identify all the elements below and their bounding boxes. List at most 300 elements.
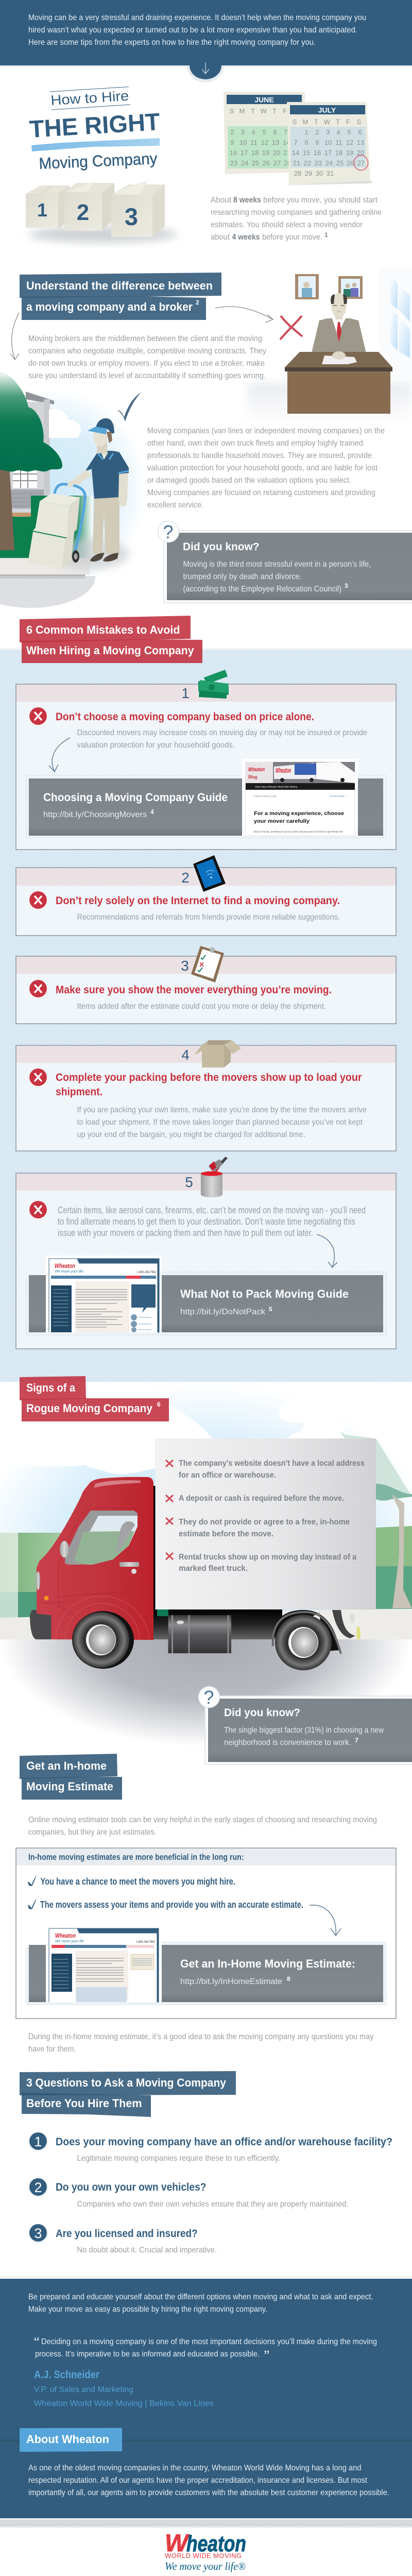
number 4: 4 <box>181 1047 190 1063</box>
text: during the estimate: have for them. <box>28 2045 76 2054</box>
icon: three numbered moving boxes <box>26 180 178 243</box>
screenshot: web page <box>46 1256 162 1332</box>
calendar: July: 8 <box>304 139 308 146</box>
calendar: July: 17 <box>324 149 332 157</box>
calendars: June and July <box>224 92 373 185</box>
calendar: July: 14 <box>292 149 299 157</box>
heading: get an in-home moving estimate: Moving Estimate <box>26 1780 113 1793</box>
truck box: signs text: estimate before the move. <box>179 1530 273 1538</box>
callout: choosing a moving company guide: Choosing a Moving Company Guide <box>43 791 228 804</box>
calendar: July: 15 <box>303 149 310 157</box>
calendar: July: 31 <box>327 170 334 177</box>
text: when to start researching <box>211 196 382 242</box>
badge 2: 2 <box>34 2180 42 2195</box>
sky <box>0 389 147 590</box>
truck box: signs text <box>156 1438 376 1609</box>
text: moving brokers: companies who negotiate multiple, competitive moving contracts. They <box>28 347 266 355</box>
about text: As one of the oldest moving companies in the country, Wheaton World Wide Moving has a long and <box>28 2464 362 2472</box>
icon: check 1 <box>28 1875 37 1886</box>
calendar: July: 18 <box>335 149 342 157</box>
calendar: July: 7 <box>294 139 298 146</box>
screenshot: blog post: your mover carefully <box>254 819 310 824</box>
box 2 <box>64 181 114 231</box>
dolly handle and frame <box>55 484 85 556</box>
calendar: June: 2 <box>230 128 234 136</box>
calendar: July: 2 <box>315 128 319 136</box>
calendar: June: 9 <box>230 139 234 146</box>
screenshot: blog post: Back in the day, promising to serve up beer and pizza was all it took to rope friends into <box>254 831 343 834</box>
blue brush stroke <box>31 138 160 151</box>
icon: cross 1 <box>166 1460 173 1467</box>
calendar: July: 19 <box>346 149 353 157</box>
heading: moving company vs broker: 2 <box>196 299 199 306</box>
callout: did you know commute: Did you know? <box>224 1707 300 1719</box>
panel: in-home estimates: In-home moving estimates are more beneficial in the long run: <box>28 1852 244 1862</box>
box 1: 1 <box>37 199 47 221</box>
calendar: July: 21 <box>293 159 300 167</box>
illustration: broker at desk <box>247 268 412 425</box>
panel: mistake 1 price: valuation protection for your household goods. <box>77 741 235 750</box>
attribution: A.J. Schneider <box>34 2369 99 2381</box>
calendar: June: 7 <box>284 128 288 136</box>
badge 2 <box>29 2178 47 2197</box>
picture frames <box>295 274 363 299</box>
dolly wheel <box>72 550 79 563</box>
icon: stack of money <box>198 670 229 699</box>
text: moving companies: Moving companies are focused on retaining customers and providing <box>147 488 375 497</box>
panel: mistake 4 packing: up your end of the bargain, you might be charged for additional time. <box>77 1130 305 1139</box>
icon: down arrow tab <box>187 62 224 82</box>
head <box>97 440 107 453</box>
text: moving companies <box>147 427 385 510</box>
calendar: June: 18 <box>251 149 259 157</box>
grass left <box>0 1533 72 1618</box>
title: How to Hire the Right Moving Company: THE RIGHT <box>28 108 161 143</box>
calendar: June: 24 <box>241 159 248 167</box>
text: moving companies: valuation protection for your household goods, and are liable for lost <box>147 464 378 472</box>
calendar: June: T <box>251 107 255 115</box>
callout: what not to pack guide: http://bit.ly/DoNotPack <box>180 1308 266 1316</box>
text: when to start researching: before you move, you should start <box>263 196 378 205</box>
callout: get an in-home moving estimate: 8 <box>287 1975 290 1982</box>
text: when to start researching: 8 weeks <box>233 196 261 205</box>
screenshot: estimate web page: 1-800-248-7962 <box>136 1941 156 1944</box>
calendar: July: T <box>336 118 340 126</box>
screenshot: blog post: Blog <box>248 774 258 779</box>
panel: mistake 3 show everything: Make sure you show the mover everything you’re moving. <box>56 984 332 996</box>
callout: did you know stress: (according to the Employee Relocation Council) <box>183 585 341 594</box>
attribution: Wheaton World Wide Moving | Bekins Van Lines <box>34 2399 214 2408</box>
conclusion text: Make your move as easy as possible by hiring the right moving company. <box>28 2305 267 2314</box>
calendar: June: 13 <box>272 139 279 146</box>
calendar: July: 24 <box>325 159 333 167</box>
bumper <box>30 1610 52 1639</box>
illustration: mover with dolly <box>0 371 147 608</box>
icon: check mark for moving companies <box>117 392 141 421</box>
about text: respected reputation. All of our agents have the proper accreditation, insurance and licenses. But most <box>28 2476 368 2485</box>
illustration: truck scene background <box>0 1383 412 1747</box>
quote: ” <box>262 2348 269 2363</box>
tree right <box>341 1432 412 1608</box>
conclusion text <box>28 2293 373 2314</box>
icon: question mark <box>199 1687 219 1708</box>
rear light bracket <box>332 1610 360 1640</box>
badge 1 <box>29 2132 47 2151</box>
calendar: July: JULY <box>318 106 336 114</box>
icon: question mark: ? <box>163 521 174 543</box>
heading: 3 questions <box>20 2071 236 2117</box>
shirt <box>85 451 129 499</box>
question 3: Are you licensed and insured? <box>56 2228 198 2240</box>
calendar: July: S <box>357 118 362 126</box>
mover figure <box>68 418 129 562</box>
icon: open cardboard box <box>194 1040 241 1067</box>
callout: choosing a moving company guide: http://bit.ly/ChoosingMovers <box>43 810 147 819</box>
truck box: signs text: They do not provide or agree to a free, in-home <box>179 1518 350 1527</box>
calendar: June: 11 <box>250 139 258 146</box>
section background: common mistakes <box>0 647 412 1382</box>
truck box: signs text: A deposit or cash is required before the move. <box>179 1494 344 1503</box>
box 3: 3 <box>125 203 138 230</box>
number 3: 3 <box>181 958 189 974</box>
screenshot: estimate web page: Wheaton <box>55 1932 76 1939</box>
calendar: June: 20 <box>273 149 280 157</box>
text: moving brokers <box>28 334 266 380</box>
panel: mistake 4 packing: shipment. <box>56 1086 102 1098</box>
icon: clipboard <box>191 946 224 982</box>
calendar: July: 30 <box>316 170 323 177</box>
heading: signs of a rogue moving company <box>20 1376 169 1421</box>
icon: red cross circle <box>28 979 48 998</box>
calendar: July: 5 <box>347 128 351 136</box>
icon: check 2 <box>28 1899 37 1909</box>
panel: mistake 2 internet: Recommendations and referrals from friends provide more reliable suggestions. <box>77 913 340 922</box>
panel: mistake 5 what not to pack: to find alternate means to get them to your destination. Don’t waste time negotiating this <box>58 1216 355 1227</box>
question 3: No doubt about it. Crucial and imperative. <box>77 2246 217 2255</box>
heading: signs of a rogue moving company: Signs of a <box>26 1381 76 1394</box>
arrow: curved down to broker text <box>10 313 19 360</box>
floor shadow <box>247 382 412 425</box>
lawn <box>0 517 31 558</box>
calendar: June: 21 <box>283 149 290 157</box>
panel: mistake 4 packing: Complete your packing before the movers show up to load your <box>56 1072 362 1083</box>
callout: choosing a moving company guide: 4 <box>150 808 154 816</box>
box 2: 2 <box>77 200 89 225</box>
truck box: signs text: The company’s website doesn’t have a local address <box>179 1459 365 1468</box>
text: during the estimate <box>28 2032 374 2054</box>
panel: mistake 1 price: Discounted movers may increase costs on moving day or may not be insured or provide <box>77 728 367 737</box>
heading: 3 questions: Before You Hire Them <box>26 2097 142 2110</box>
calendar: July: 10 <box>324 139 332 146</box>
intro text: Moving can be a very stressful and draining experience. It doesn’t help when the moving company you <box>28 13 366 22</box>
hand <box>67 481 74 487</box>
screenshot: blog post <box>242 759 358 836</box>
question 2 <box>29 2178 348 2209</box>
screenshot: blog post: For a moving experience, choose <box>254 811 344 817</box>
mirror <box>60 1541 69 1557</box>
window <box>65 1511 138 1565</box>
truck box: signs text: Rental trucks show up on moving day instead of a <box>179 1553 356 1562</box>
callout: did you know stress: 3 <box>345 582 348 589</box>
text: when to start researching: 4 weeks <box>232 233 260 242</box>
text: moving companies: professionals to handle household moves. They are insured, provide <box>147 451 372 460</box>
calendar: July: 6 <box>358 128 362 136</box>
callout: what not to pack guide: What Not to Pack Moving Guide <box>180 1287 349 1300</box>
panel: in-home estimates <box>16 1848 396 2019</box>
calendar: July: 16 <box>314 149 321 157</box>
icon: cross 4 <box>166 1553 173 1560</box>
window <box>379 268 412 381</box>
text: moving brokers: do not own trucks or employ movers. If you elect to use a broker, make <box>28 359 265 368</box>
fuel tank <box>168 1615 231 1653</box>
about text <box>28 2464 389 2497</box>
heading: about wheaton <box>20 2428 122 2452</box>
door handle and lock <box>119 1562 139 1567</box>
calendar: July: 13 <box>357 139 364 146</box>
cap <box>96 418 114 434</box>
pavement and shadow <box>0 558 90 574</box>
text: moving companies: excellent service. <box>147 501 203 510</box>
question 2: Do you own your own vehicles? <box>56 2181 206 2193</box>
arms <box>68 470 92 487</box>
icon: red cross circle <box>28 1067 48 1087</box>
box 3 <box>111 180 165 237</box>
panel: in-home estimates: The movers assess your items and provide you with an accurate estimate. <box>40 1900 303 1910</box>
screenshot: estimate web page: We move your life <box>55 1940 84 1943</box>
panel: mistake 1 price <box>16 670 396 850</box>
screenshot: estimate web page <box>46 1927 162 2002</box>
calendar: July: 1 <box>304 128 308 136</box>
wheel arch and frame <box>153 1609 341 1654</box>
gap between cab and box <box>153 1486 156 1609</box>
pavement <box>0 1609 412 1639</box>
calendar: June: 4 <box>251 128 255 136</box>
callout: did you know stress: Did you know? <box>183 541 260 553</box>
calendar: June: M <box>239 107 245 115</box>
intro text: hired wasn’t what you expected or turned out to be a lot more expensive than you had anticipated. <box>28 26 357 35</box>
quote: “ <box>32 2334 40 2349</box>
heading: signs of a rogue moving company: Rogue Moving Company <box>26 1402 153 1415</box>
icon: red cross circle <box>28 1200 48 1220</box>
panel: mistake 3 show everything <box>16 946 396 1024</box>
icon: tablet <box>193 855 226 892</box>
screenshot: blog post: Posted on March 26, 2013 <box>254 795 277 798</box>
title: How to Hire the Right Moving Company <box>28 87 161 173</box>
text: moving brokers: Moving brokers are the middlemen between the client and the moving <box>28 334 262 343</box>
calendar: June: 23 <box>230 159 237 167</box>
quote <box>32 2334 377 2363</box>
grass right <box>376 1526 412 1609</box>
trousers <box>93 497 119 554</box>
callout: get an in-home moving estimate: Get an In-Home Moving Estimate: <box>180 1957 355 1970</box>
text: online estimators <box>28 1816 377 1837</box>
text: during the estimate: During the in-home moving estimate, it’s a good idea to ask the moving company any questions you may <box>28 2032 374 2041</box>
arrow <box>317 1234 337 1267</box>
question 1 <box>29 2132 392 2163</box>
moving boxes on dolly <box>28 494 80 568</box>
calendar: July: 25 <box>336 159 344 167</box>
calendar: July: T <box>314 118 318 126</box>
question 1: Legitimate moving companies require these to run efficiently. <box>77 2154 280 2163</box>
panel: mistake 4 packing: If you are packing your own items, make sure you’re done by the time the movers arrive <box>77 1106 367 1114</box>
sky <box>0 1383 412 1739</box>
arrow <box>49 738 70 772</box>
calendar: June: F <box>283 107 287 115</box>
title: How to Hire the Right Moving Company: How to Hire <box>50 88 129 108</box>
calendar: June <box>224 92 305 174</box>
calendar: July: 23 <box>315 159 322 167</box>
panel: mistake 2 internet <box>16 855 396 936</box>
quote: process. It’s imperative to be as informed and educated as possible. <box>35 2350 260 2359</box>
panel: mistake 3 show everything: Items added after the estimate could cost you more or delay the shipment. <box>77 1002 326 1011</box>
heading: signs of a rogue moving company: 6 <box>157 1401 161 1408</box>
screenshot: blog post: ← Previous Next → <box>327 795 347 798</box>
panel: mistake 5 what not to pack <box>16 1157 396 1349</box>
screenshot: blog post: Home About Wheaton World Wide Moving <box>255 786 297 789</box>
calendar: July: 20 <box>357 149 364 157</box>
heading: moving company vs broker: a moving company and a broker <box>26 300 193 313</box>
logo: Wheaton <box>165 2529 246 2572</box>
attribution <box>34 2369 214 2408</box>
conclusion text: Be prepared and educate yourself about the different options when moving and what to ask and expect. <box>28 2293 373 2301</box>
calendar: July: 29 <box>305 170 312 177</box>
logo: Wheaton: W <box>165 2529 190 2556</box>
icon: question mark: ? <box>203 1687 214 1708</box>
calendar: June: 14 <box>283 139 290 146</box>
icon: red cross on broker <box>280 316 302 340</box>
clouds <box>0 1391 345 1474</box>
text: online estimators: companies, but they are just estimates. <box>28 1828 157 1837</box>
arrow <box>310 1905 341 1936</box>
text: moving companies: or damaged goods based on the valuation options you select. <box>147 476 351 485</box>
logo: Wheaton: heaton <box>186 2531 246 2556</box>
road shadow <box>13 1639 399 1741</box>
number 1: 1 <box>181 685 190 701</box>
callout: did you know commute: The single biggest factor (31%) in choosing a new <box>224 1726 384 1735</box>
question 2: Companies who own their own vehicles ensure that they are properly maintained. <box>77 2200 348 2209</box>
calendar: July: M <box>303 118 308 126</box>
attribution: V.P. of Sales and Marketing <box>34 2385 133 2394</box>
intro text <box>28 13 366 47</box>
callout: what not to pack guide <box>26 1256 386 1335</box>
callout: did you know commute: 7 <box>355 1737 358 1744</box>
heading: 3 questions: 3 Questions to Ask a Moving Company <box>26 2076 227 2089</box>
wheel rear <box>275 1615 332 1670</box>
panel: mistake 4 packing <box>16 1040 396 1151</box>
screenshot: blog post: Wheaton <box>248 767 265 773</box>
broker figure <box>312 293 366 358</box>
screenshot: web page: 1-800-248-7962 <box>137 1271 157 1274</box>
calendar: June: 28 <box>284 159 291 167</box>
calendar: June: 3 <box>241 128 245 136</box>
heading: 6 common mistakes <box>20 616 202 663</box>
screenshot: blog post: Wheaton <box>276 766 291 774</box>
calendar: July: 9 <box>315 139 319 146</box>
house <box>0 392 54 517</box>
calendar: June: 25 <box>252 159 259 167</box>
screenshot: web page: We move your life <box>55 1270 83 1274</box>
panel: mistake 4 packing: to load your shipment. If the move takes longer than planned because you’ve not kept <box>77 1118 363 1127</box>
calendar: July: 28 <box>294 170 301 177</box>
calendar: June: 10 <box>239 139 247 146</box>
number 2: 2 <box>181 870 190 886</box>
panel: mistake 1 price: Don’t choose a moving company based on price alone. <box>56 711 314 723</box>
heading: moving company vs broker <box>20 273 221 320</box>
question 1: Does your moving company have an office and/or warehouse facility? <box>56 2136 392 2148</box>
icon: cross 3 <box>166 1518 173 1524</box>
truck box: signs text: marked fleet truck. <box>179 1564 248 1573</box>
about text: importantly of all, our agents aim to provide customers with the absolute best customer experience possible. <box>28 2488 389 2497</box>
calendar: July: 12 <box>346 139 353 146</box>
panel: mistake 2 internet: Don’t rely solely on the Internet to find a moving company. <box>56 895 340 907</box>
calendar: July: F <box>346 118 350 126</box>
calendar: June: 16 <box>230 149 237 157</box>
title: How to Hire the Right Moving Company: Moving Company <box>39 149 158 173</box>
truck box: signs text: for an office or warehouse. <box>179 1471 276 1480</box>
callout: choosing a moving company guide <box>26 759 386 838</box>
intro band <box>0 0 412 82</box>
text: when to start researching: before your move. <box>262 233 322 242</box>
calendar: June: 19 <box>262 149 269 157</box>
red circle on 27 <box>354 156 368 170</box>
text: when to start researching: researching moving companies and gathering online <box>211 208 382 217</box>
calendar: June: 26 <box>263 159 270 167</box>
calendar: July: S <box>293 118 297 126</box>
callout: did you know stress: trumped only by death and divorce. <box>183 572 302 581</box>
badge 3 <box>29 2224 47 2243</box>
calendar: June: 27 <box>273 159 281 167</box>
logo: Wheaton: We move your life® <box>165 2560 246 2572</box>
calendar: July: 3 <box>326 128 330 136</box>
shoes <box>90 553 118 562</box>
calendar: June: JUNE <box>254 96 274 104</box>
heading: about wheaton: About Wheaton <box>26 2433 109 2446</box>
text: moving companies: other hand, own their own truck fleets and employ highly trained <box>147 439 363 448</box>
calendar: July: W <box>324 118 331 126</box>
box 1 <box>26 185 70 229</box>
calendar: July: 11 <box>335 139 342 146</box>
calendar: June: S <box>230 107 234 115</box>
intro text: Here are some tips from the experts on how to hire the right moving company for you. <box>28 38 316 47</box>
tree <box>0 371 62 550</box>
cab <box>36 1477 153 1640</box>
calendar: July: 4 <box>336 128 340 136</box>
desk <box>285 351 392 414</box>
calendar: June: W <box>261 107 267 115</box>
panel: mistake 5 what not to pack: issue with your movers or packing them and then have to pull them out later. <box>58 1228 313 1238</box>
calendar: June: 12 <box>261 139 268 146</box>
logo: Wheaton: WORLD WIDE MOVING <box>165 2552 242 2560</box>
screenshot: web page: Wheaton <box>55 1262 75 1269</box>
text: moving brokers: sure you understand its level of accountability if something goes wrong. <box>28 371 266 380</box>
question 3 <box>29 2224 217 2255</box>
icon: cross 2 <box>166 1495 173 1502</box>
badge 3: 3 <box>34 2226 42 2241</box>
text: when to start researching: estimates. You should select a moving vendor <box>211 221 363 229</box>
icon: red cross circle <box>28 707 48 726</box>
illustration: red moving truck <box>30 1438 376 1670</box>
icon: question mark <box>158 521 179 543</box>
callout: get an in-home moving estimate <box>26 1927 386 2005</box>
icon: paint can and brush <box>201 1157 228 1197</box>
calendar: July: 26 <box>347 159 354 167</box>
calendar: June: T <box>272 107 277 115</box>
marker light and headlamp <box>44 1596 48 1600</box>
text: when to start researching: about <box>211 233 230 242</box>
text: moving companies: Moving companies (van lines or independent moving companies) on the <box>147 427 385 435</box>
heading: get an in-home moving estimate <box>20 1754 122 1800</box>
number 5: 5 <box>185 1174 193 1190</box>
